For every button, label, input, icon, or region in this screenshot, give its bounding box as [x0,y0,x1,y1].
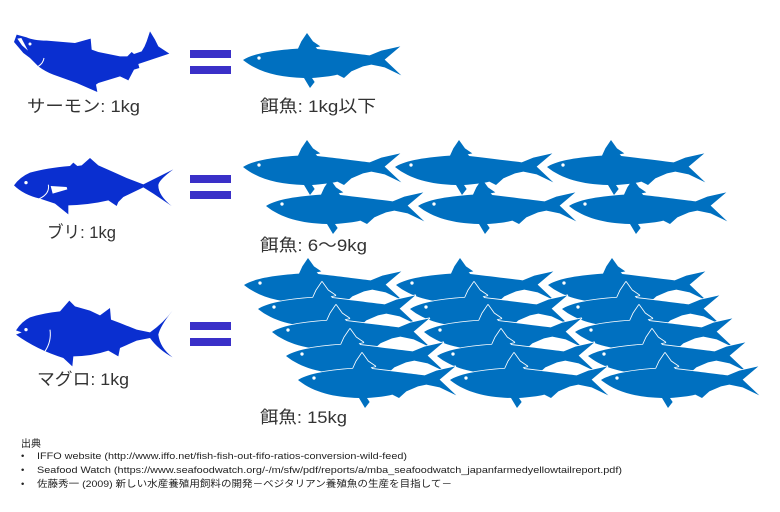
label: tuna 1kg: マグロ: 1kg [37,370,129,389]
label: bait fish 1kg or less: 餌魚: 1kg以下 [260,97,376,116]
source: Sato: • [21,479,24,490]
icon: yellowtail [14,158,173,214]
source: IFFO: IFFO website (http://www.iffo.net/fish-fish-out-fifo-ratios-conversion-wild-feed) [37,451,407,462]
equals sign [190,50,231,74]
row: salmon [14,31,401,116]
sources heading: 出典 [21,437,41,450]
source: Seafood Watch: Seafood Watch (https://www.seafoodwatch.org/-/m/sfw/pdf/reports/a/mba_seafoodwatch_japanfarmedyellowtailreport.pdf) [37,465,622,476]
icon: salmon [14,31,169,92]
row: yellowtail [14,140,727,255]
source: Sato: 佐藤秀一 (2009) 新しい水産養殖用飼料の開発－ベジタリアン養殖魚の生産を目指して－ [37,478,452,490]
icon: tuna [16,301,173,366]
equals sign [190,322,231,346]
equals sign [190,175,231,199]
label: bait fish 15kg: 餌魚: 15kg [260,408,347,427]
label: bait fish 6-9kg: 餌魚: 6～9kg [260,236,367,255]
icon: bait fish [243,33,401,88]
label: salmon 1kg: サーモン: 1kg [27,97,140,116]
row: tuna [16,258,759,427]
sources [21,437,622,490]
bait fish group: 6 fish [243,140,727,234]
source: IFFO: • [21,451,24,462]
source: Seafood Watch: • [21,465,24,476]
label: yellowtail 1kg: ブリ: 1kg [47,222,116,242]
bait fish group: 15 fish [244,258,759,408]
